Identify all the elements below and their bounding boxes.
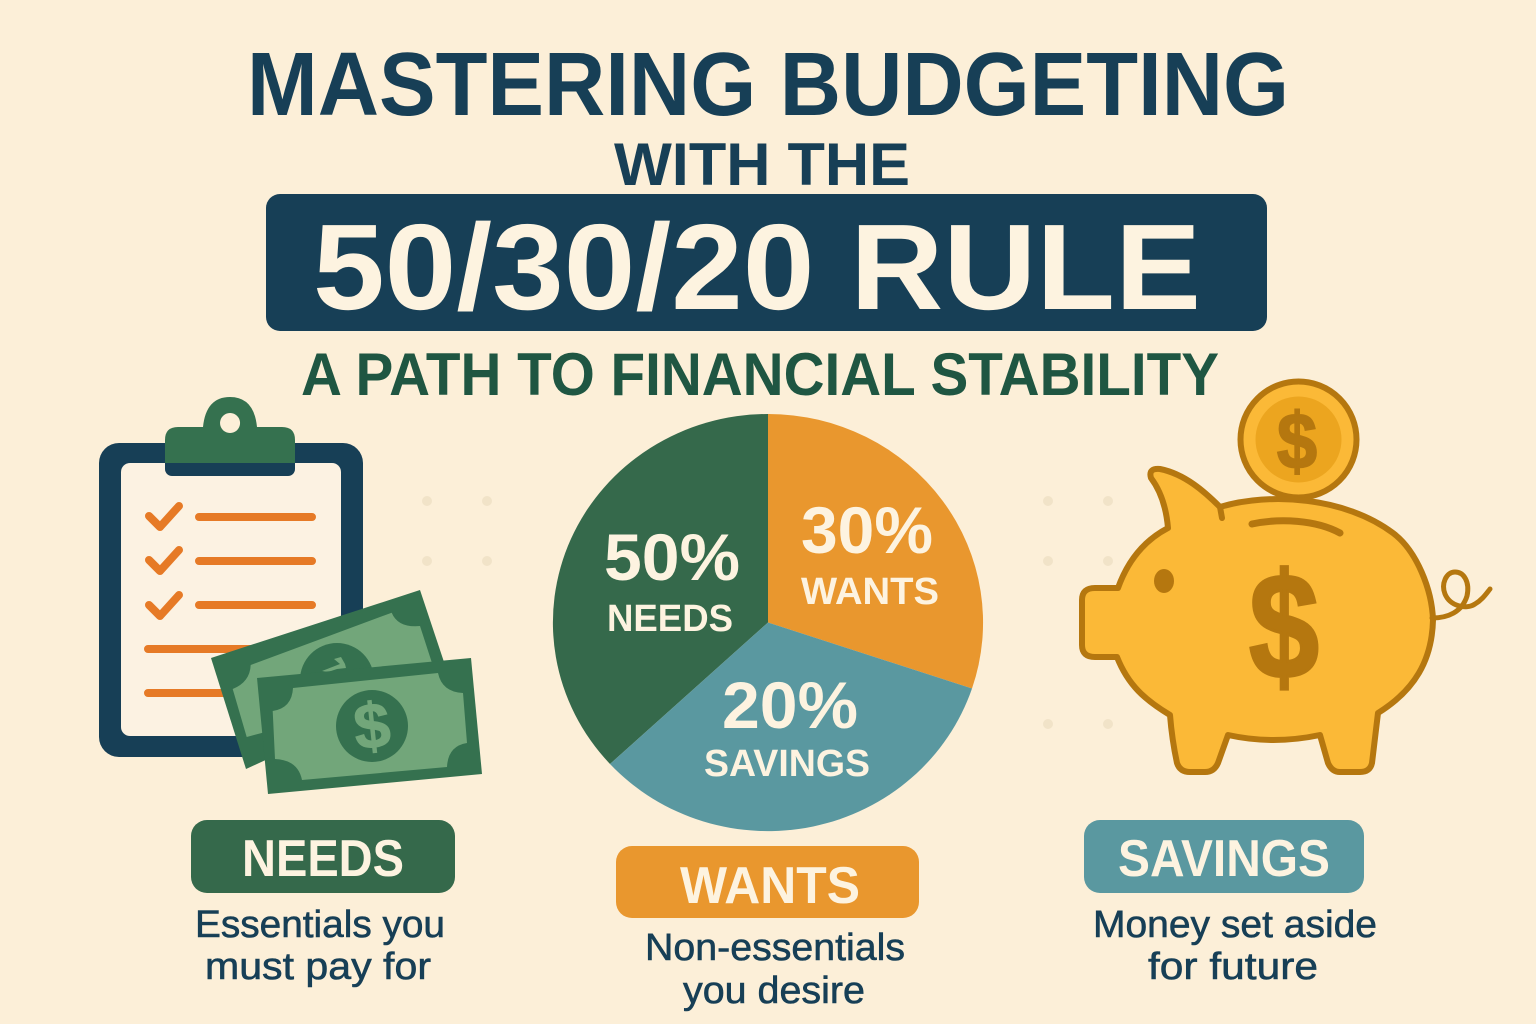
clipboard clip: [165, 397, 295, 476]
ear crease: [1220, 507, 1222, 518]
icon: front banknote: $: [350, 688, 394, 764]
slice: savings 20%: [610, 622, 972, 831]
icon: front banknote: [257, 658, 482, 794]
pig eye: [1154, 569, 1174, 593]
icon: piggy bank with coin: [1082, 382, 1490, 772]
description: wants: Non-essentials: [645, 927, 905, 969]
description: savings: [1093, 904, 1377, 988]
slice: wants 30%: [768, 414, 983, 688]
description: needs: Essentials you: [195, 904, 445, 946]
label: needs: NEEDS: [242, 830, 404, 888]
checklist: [148, 506, 312, 693]
dollar sign: $: [1249, 542, 1319, 710]
description: needs: [195, 904, 445, 988]
tagline: A PATH TO FINANCIAL STABILITY: [301, 341, 1219, 408]
column: wants: [616, 846, 919, 1012]
label: savings: [1084, 820, 1364, 893]
slice: savings 20%: 20%: [722, 668, 858, 742]
description: wants: [645, 927, 905, 1012]
description: savings: Money set aside: [1093, 904, 1377, 946]
pig tail: [1432, 572, 1490, 618]
description: needs: must pay for: [205, 946, 431, 988]
label: savings: SAVINGS: [1118, 830, 1330, 888]
column: savings: [1084, 820, 1377, 988]
label: wants: WANTS: [680, 857, 860, 915]
title: MASTERING BUDGETING: [247, 35, 1289, 135]
coin: $: [1277, 396, 1317, 485]
slice: wants 30%: WANTS: [801, 571, 939, 613]
icon: clipboard checklist with money: [99, 397, 482, 794]
slice: needs 50%: NEEDS: [607, 598, 733, 640]
coin: [1240, 382, 1356, 498]
column: needs: [191, 820, 455, 988]
icon: rear banknote: [211, 590, 444, 769]
slice: needs 50%: [553, 414, 768, 764]
pie chart: [553, 414, 983, 831]
coin slot: [1252, 521, 1340, 533]
label: needs: [191, 820, 455, 893]
subtitle: with the: WITH THE: [614, 131, 910, 198]
slice: savings 20%: SAVINGS: [704, 743, 870, 785]
description: wants: you desire: [683, 970, 865, 1012]
slice: wants 30%: 30%: [801, 493, 933, 567]
label: wants: [616, 846, 919, 918]
description: savings: for future: [1148, 946, 1318, 988]
slice: needs 50%: 50%: [604, 520, 740, 594]
banner: 50/30/20 rule: 50/30/20 RULE: [313, 199, 1201, 335]
pig body: [1082, 469, 1433, 772]
